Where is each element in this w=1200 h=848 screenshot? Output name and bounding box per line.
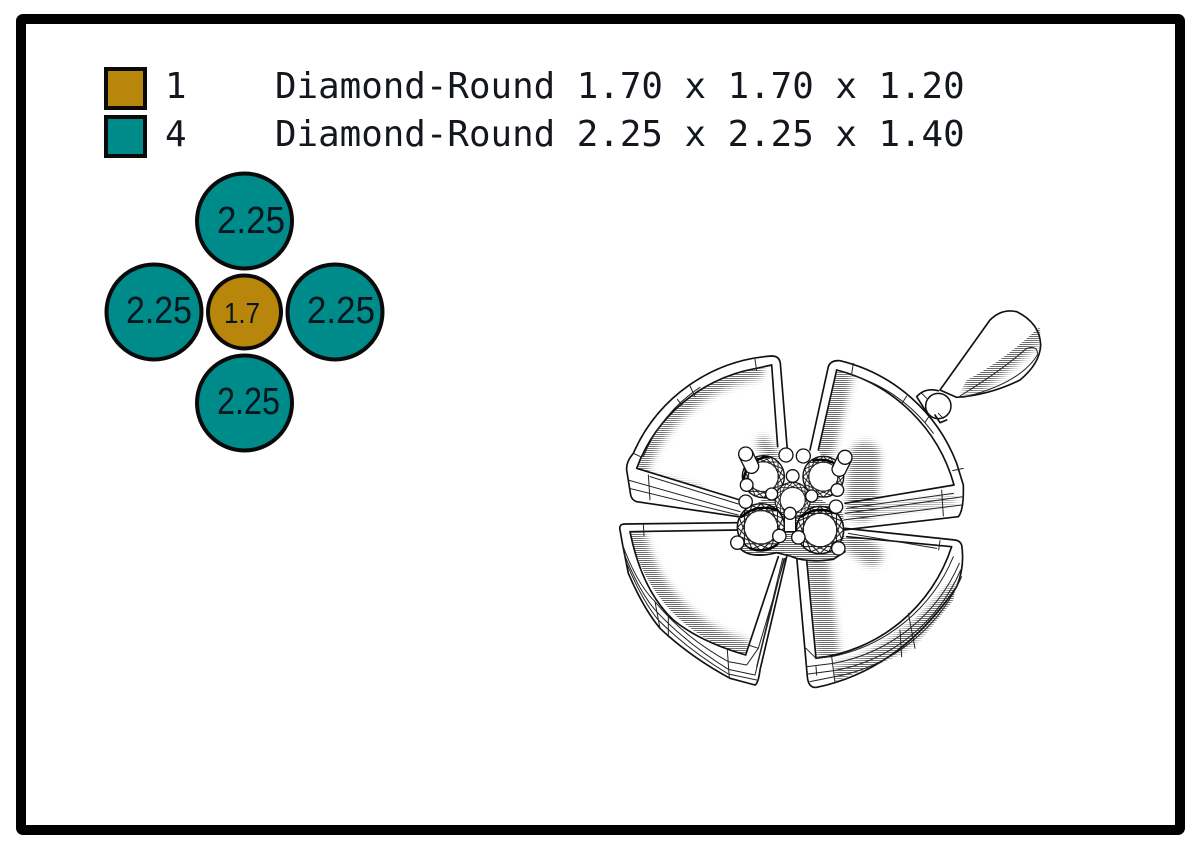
pendant line drawing bbox=[618, 310, 1042, 688]
setting base outline bbox=[740, 548, 845, 561]
prongs bbox=[731, 447, 852, 555]
stone: top 2.25 bbox=[197, 174, 292, 268]
stone: right 2.25: 2.25 bbox=[307, 290, 375, 332]
swatch: 1.70 stone colour bbox=[106, 69, 145, 108]
stone: bottom 2.25 bbox=[197, 356, 292, 450]
stone: bottom right bbox=[796, 506, 844, 554]
stone: top left bbox=[742, 456, 784, 498]
bail bbox=[917, 311, 1041, 423]
stone: bottom 2.25: 2.25 bbox=[217, 381, 280, 423]
legend row: 4 Diamond-Round 2.25: Diamond-Round 2.25 x 2.25 x 1.40 bbox=[275, 114, 965, 155]
petal: top left bbox=[627, 356, 787, 517]
stone: centre bbox=[775, 482, 810, 518]
setting base bbox=[740, 487, 845, 561]
petal: top right bbox=[810, 361, 963, 530]
stone: centre 1.7 bbox=[208, 276, 281, 348]
stone: left 2.25 bbox=[106, 264, 202, 360]
stone: left 2.25: 2.25 bbox=[126, 290, 192, 332]
stone rim highlights bbox=[742, 457, 842, 550]
stone: bottom left bbox=[737, 504, 785, 551]
legend row: 1 Diamond-Round 1.70: Diamond-Round 1.70 x 1.70 x 1.20 bbox=[275, 66, 965, 107]
petal: bottom right bbox=[797, 528, 963, 687]
stone layout diagram bbox=[106, 174, 382, 450]
gem cluster bbox=[731, 447, 852, 561]
stone: centre 1.7: 1.7 bbox=[224, 298, 260, 330]
legend row: 1 Diamond-Round 1.70: 1 bbox=[165, 66, 187, 107]
stone: top right bbox=[803, 456, 844, 497]
legend bbox=[106, 66, 965, 156]
legend row: 4 Diamond-Round 2.25: 4 bbox=[165, 114, 187, 155]
hatch shading bbox=[631, 326, 1040, 681]
stone: top 2.25: 2.25 bbox=[217, 200, 285, 242]
petal: bottom left bbox=[620, 523, 787, 685]
swatch: 2.25 stone colour bbox=[106, 117, 145, 156]
stone: right 2.25 bbox=[288, 264, 382, 360]
